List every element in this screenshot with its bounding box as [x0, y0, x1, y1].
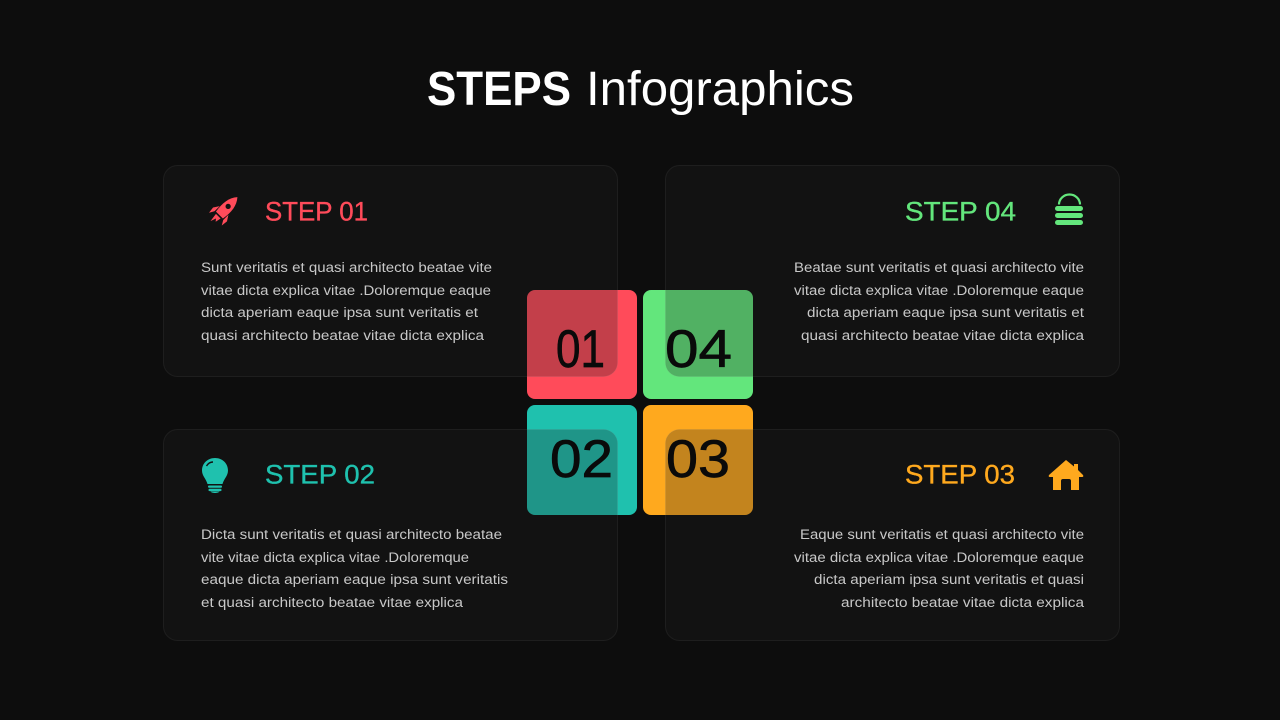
text block: step 02: vite vitae dicta explica vitae .Doloremque [201, 550, 469, 565]
text block: step 03: vitae dicta explica vitae .Doloremque eaque [794, 550, 1084, 565]
title [427, 63, 854, 116]
panel: step 01 [164, 166, 618, 376]
heading: step 04: STEP 04 [905, 196, 1016, 226]
text block: step 02: Dicta sunt veritatis et quasi architecto beatae [201, 527, 502, 542]
icon: light bulb [202, 458, 228, 493]
step numbers: 04 [665, 320, 732, 379]
text block: step 04: dicta aperiam eaque ipsa sunt veritatis et [807, 305, 1084, 320]
text block: step 01 [201, 260, 492, 343]
step numbers: 03 [666, 430, 730, 489]
title: STEPS [427, 63, 571, 116]
text block: step 01: vitae dicta explica vitae .Doloremque eaque [201, 283, 491, 298]
icon: rocket [205, 190, 244, 230]
step numbers: 01 [556, 320, 605, 379]
centre colour squares [527, 290, 753, 515]
heading: step 02: STEP 02 [265, 460, 375, 490]
text block: step 03: architecto beatae vitae dicta explica [841, 595, 1085, 610]
text block: step 03: Eaque sunt veritatis et quasi architecto vite [800, 527, 1084, 542]
text block: step 01: quasi architecto beatae vitae dicta explica [201, 328, 485, 343]
panel: step 02 [164, 430, 618, 640]
step numbers [550, 320, 732, 489]
title: Infographics [586, 63, 854, 116]
text block: step 03 [794, 527, 1085, 610]
icon: house [1049, 460, 1083, 490]
panel: step 03 [666, 430, 1120, 640]
text block: step 01: dicta aperiam eaque ipsa sunt veritatis et [201, 305, 478, 320]
text block: step 03: dicta aperiam ipsa sunt veritatis et quasi [814, 572, 1084, 587]
text block: step 02: et quasi architecto beatae vitae explica [201, 595, 464, 610]
icon: basket [1055, 194, 1083, 225]
text block: step 01: Sunt veritatis et quasi architecto beatae vite [201, 260, 492, 275]
heading: step 01: STEP 01 [265, 196, 368, 226]
text block: step 02: eaque dicta aperiam eaque ipsa sunt veritatis [201, 572, 508, 587]
text block: step 04: vitae dicta explica vitae .Doloremque eaque [794, 283, 1084, 298]
text block: step 02 [201, 527, 508, 610]
text block: step 04: Beatae sunt veritatis et quasi architecto vite [794, 260, 1084, 275]
step numbers: 02 [550, 430, 613, 489]
text block: step 04: quasi architecto beatae vitae dicta explica [801, 328, 1085, 343]
text block: step 04 [794, 260, 1085, 343]
heading: step 03: STEP 03 [905, 460, 1015, 490]
panel: step 04 [666, 166, 1120, 376]
